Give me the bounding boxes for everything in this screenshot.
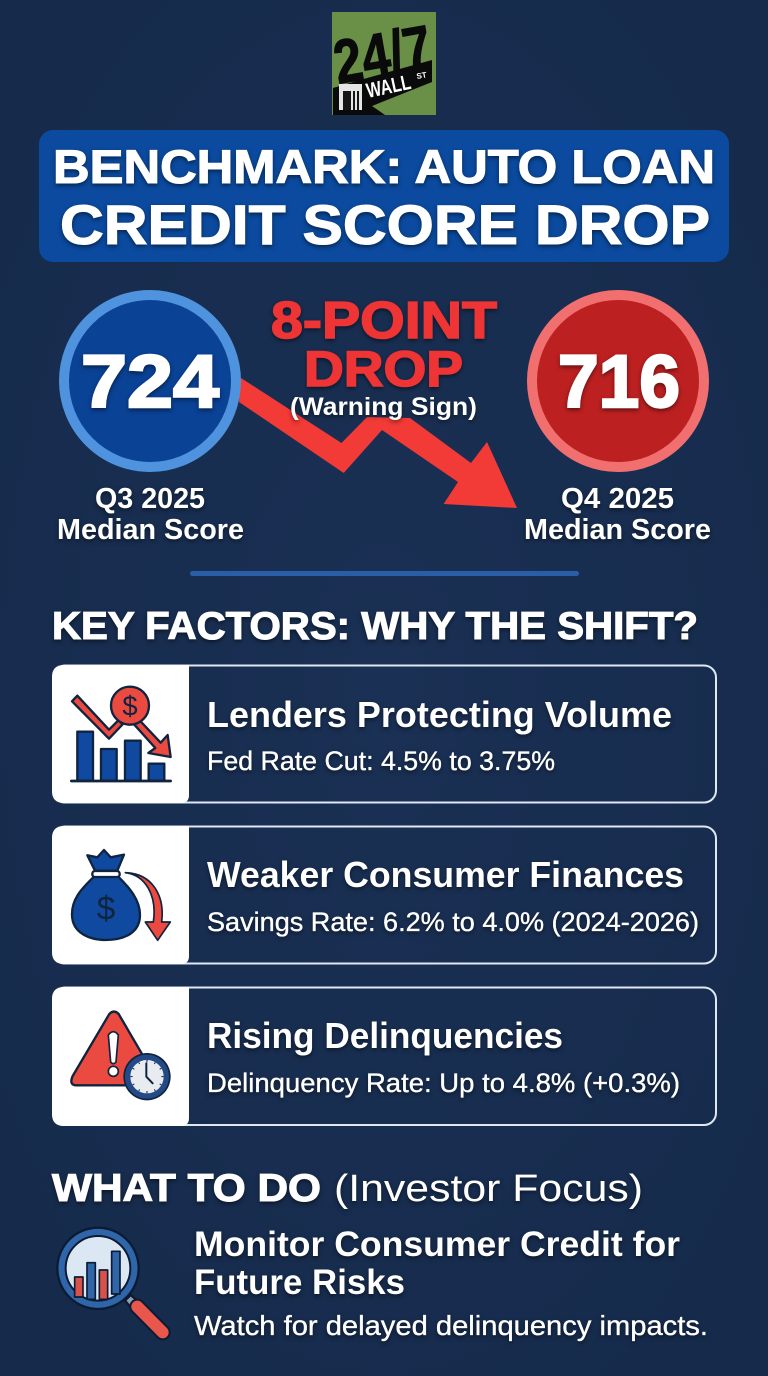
circle: Q4 2025 score 716 (532, 295, 704, 467)
panel: weaker consumer finances (52, 826, 716, 964)
panel: lenders protecting volume (52, 665, 716, 803)
logo: 24/7 Wall St: WALL (364, 71, 413, 103)
label: Q4 2025 median score: Median Score (524, 514, 711, 546)
title banner: BENCHMARK: AUTO LOAN (53, 140, 715, 193)
text block: monitor consumer credit (194, 1225, 708, 1341)
panel: lenders protecting volume: Fed Rate Cut: 4.5% to 3.75% (207, 746, 555, 776)
heading: what to do: (Investor Focus) (334, 1168, 643, 1210)
logo: 24/7 Wall St: 24/7 (328, 13, 437, 98)
heading: key factors: KEY FACTORS: WHY THE SHIFT? (52, 605, 698, 648)
title banner: CREDIT SCORE DROP (60, 193, 710, 256)
heading: what to do (52, 1167, 643, 1210)
title banner (39, 130, 729, 262)
heading: what to do: WHAT TO DO (52, 1167, 321, 1210)
circle: Q3 2025 score 724: 724 (81, 340, 219, 423)
logo: 24/7 Wall St: ST (416, 70, 428, 81)
callout: 8-point drop (271, 292, 497, 421)
label: Q3 2025 median score: Median Score (57, 514, 244, 546)
circle: Q4 2025 score 716: 716 (558, 340, 680, 423)
callout: 8-point drop: 8-POINT (271, 292, 497, 350)
panel: rising delinquencies (52, 987, 716, 1126)
callout: 8-point drop: DROP (304, 341, 463, 397)
panel: rising delinquencies: Rising Delinquencies (207, 1015, 563, 1056)
icon: money bag with down arrow: $ (97, 890, 115, 927)
panel: weaker consumer finances: Weaker Consumer Finances (207, 854, 684, 895)
callout: 8-point drop: (Warning Sign) (290, 393, 477, 421)
label: Q3 2025 median score (57, 483, 244, 546)
label: Q4 2025 median score (524, 483, 711, 546)
icon: money bag with down arrow (72, 850, 170, 940)
icon: falling bar chart with dollar (71, 687, 171, 781)
logo: 24/7 Wall St (328, 12, 437, 115)
text block: monitor consumer credit: Monitor Consumer Credit for (194, 1225, 680, 1264)
label: Q3 2025 median score: Q3 2025 (95, 483, 205, 515)
icon: falling bar chart with dollar: $ (122, 690, 138, 721)
panel: weaker consumer finances: Savings Rate: 6.2% to 4.0% (2024-2026) (207, 907, 699, 937)
icon: warning triangle with clock (71, 1012, 171, 1100)
label: Q4 2025 median score: Q4 2025 (561, 483, 674, 515)
arrow: drop from 724 to 716 (239, 378, 517, 508)
panel: rising delinquencies: Delinquency Rate: Up to 4.8% (+0.3%) (207, 1068, 680, 1098)
text block: monitor consumer credit: Watch for delayed delinquency impacts. (194, 1310, 708, 1341)
circle: Q3 2025 score 724 (64, 295, 236, 467)
panel: lenders protecting volume: Lenders Protecting Volume (207, 694, 672, 735)
icon: magnifying glass over bar chart (57, 1228, 163, 1332)
text block: monitor consumer credit: Future Risks (194, 1263, 405, 1302)
